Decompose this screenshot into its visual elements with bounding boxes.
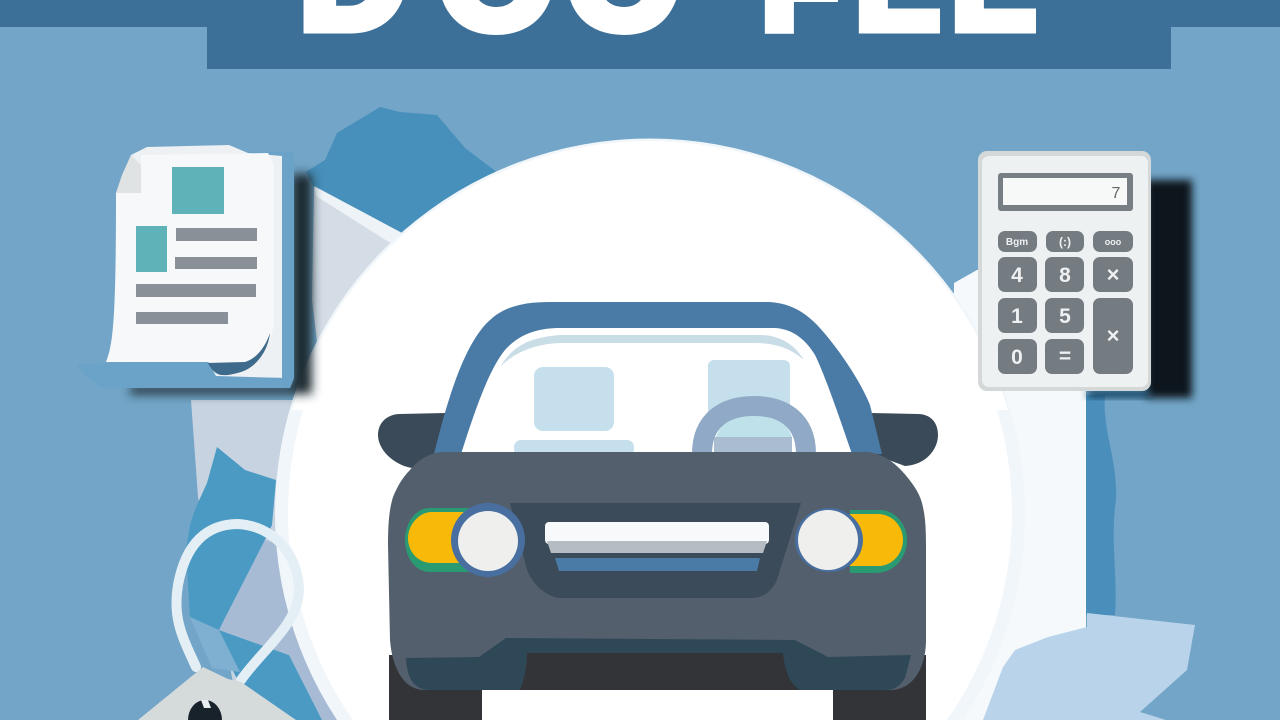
calculator key labels: 8 [1059,264,1071,287]
icon: calculator [978,151,1192,398]
car windshield [461,328,852,454]
large white circle [275,138,1025,720]
background paper: light blue lower right [983,613,1195,720]
car seats [534,367,614,431]
calculator key labels: (:) [1059,235,1071,249]
car grille bars [545,522,769,544]
calculator display [998,173,1133,211]
document shadow [130,174,312,394]
background paper: lower left sheet [186,400,345,720]
calculator key labels [1006,235,1122,369]
background paper: upper left torn sheet [306,107,498,350]
car body [388,452,926,690]
calculator key labels: × [1107,262,1119,287]
key tag loop [176,524,299,680]
icon: key tag [138,524,299,720]
calculator key labels: 4 [1011,264,1023,287]
document teal blocks [172,167,224,214]
calculator key labels: ooo [1105,237,1122,247]
calculator key labels: 5 [1059,305,1071,328]
title banner [0,0,1280,69]
calculator key labels: = [1059,345,1071,368]
car grille [510,503,801,598]
calculator shadow [1146,180,1192,398]
document text lines [136,228,257,324]
calculator key labels: 1 [1011,305,1023,328]
key tag hole [188,700,222,720]
calculator body [978,151,1151,391]
icon: document [77,145,312,394]
document page [106,153,274,362]
icon: car [378,302,938,720]
calculator keys [998,231,1133,374]
document curl [77,363,294,388]
document back sheet [116,145,294,388]
car steering wheel [716,412,792,437]
car roof frame [434,302,882,454]
background paper: right sheet [950,262,1116,720]
car lower skirt [406,638,911,690]
right headlight [795,508,907,573]
left headlight [405,503,525,577]
icon: calculator: 7 [1112,185,1121,202]
car mirrors [378,413,445,468]
calculator key labels: × [1107,323,1119,348]
car wheels [389,655,482,720]
car bumper opening [520,653,800,690]
key tag body [138,667,296,720]
calculator key labels: 0 [1011,346,1023,369]
calculator key labels: Bgm [1006,237,1028,248]
